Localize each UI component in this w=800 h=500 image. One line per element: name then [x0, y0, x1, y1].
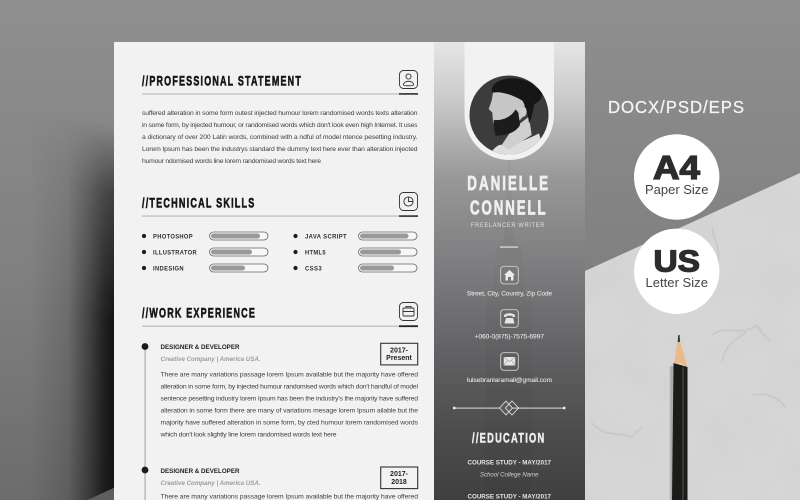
job description: sentence pesetting industry lorem Ipsum has been the industry's the majority have suffered	[160, 396, 418, 403]
name: DANIELLE	[467, 172, 550, 195]
paragraph: a dictionary of over 200 Latin words, combined with a ndful of model ntence pesetting industry.	[142, 134, 418, 141]
job 1	[160, 343, 419, 439]
heading rule	[142, 93, 418, 95]
skill: java script	[293, 232, 417, 240]
icon: envelope	[501, 353, 518, 370]
icon: pie chart	[400, 192, 418, 210]
format label: DOCX/PSD/EPS	[608, 97, 745, 117]
job 2: DESIGNER & DEVELOPER	[160, 468, 240, 475]
pencil	[670, 335, 688, 500]
skill: indesign: INDESIGN	[153, 265, 184, 272]
badge: US letter size: US	[654, 244, 700, 278]
heading: work experience: //WORK EXPERIENCE	[142, 306, 256, 320]
icon: home	[501, 266, 518, 284]
date box	[381, 343, 418, 365]
name: CONNELL	[470, 196, 548, 220]
timeline	[142, 343, 148, 500]
heading: technical skills: //TECHNICAL SKILLS	[142, 195, 256, 210]
email: luisebranlaramail@gmail.com	[467, 377, 552, 384]
background: marble surface	[88, 173, 800, 500]
paragraph: humour ndomised words line lorem randomised words text here	[142, 158, 321, 165]
badge: US letter size	[634, 229, 719, 314]
job description: alteration in some form there are many of variations mesage lorem Ipsum ailable but the	[160, 408, 418, 415]
education entry 1: School College Name	[480, 472, 539, 479]
skill: java script: JAVA SCRIPT	[305, 233, 347, 240]
face	[488, 92, 524, 126]
heading rule	[142, 215, 418, 217]
section: professional statement	[142, 70, 418, 165]
badge: A4 paper size: A4	[653, 149, 701, 186]
hair	[492, 78, 542, 123]
job description: majority have suffered alteration in some form, by cted humour lorem randomised words	[160, 420, 419, 427]
section: technical skills	[142, 192, 418, 272]
heading: education: //EDUCATION	[472, 431, 546, 446]
education entry 1	[468, 459, 551, 479]
skill: html5: HTML5	[305, 249, 326, 256]
short divider	[500, 246, 518, 248]
badge: US letter size: Letter Size	[646, 275, 708, 290]
job description: alteration in some form, by injected humour randomised words which don't handful of model	[160, 384, 418, 391]
page shadow	[48, 132, 114, 500]
beard	[493, 109, 520, 136]
badge: A4 paper size: Paper Size	[645, 182, 708, 197]
ribbon	[464, 42, 554, 160]
ear	[523, 106, 527, 117]
resume page	[114, 42, 745, 500]
job description	[160, 372, 419, 439]
job description: There are many variations passage lorem Ipsum available but the majority have offered	[160, 372, 418, 379]
job 2	[160, 467, 418, 500]
city silhouette	[486, 160, 532, 500]
skill: illustrator	[142, 248, 268, 256]
paragraph: in some form, by injected humour, or randomised words which don't look even high Internet. It uses	[142, 122, 418, 129]
section: work experience	[142, 302, 419, 500]
job 2: Creative Company | America USA.	[160, 480, 261, 487]
marble under page shadow	[88, 488, 114, 500]
badge: A4 paper size	[634, 134, 719, 220]
skill: photoshop	[142, 232, 268, 240]
neck	[502, 117, 532, 150]
skill: html5	[293, 248, 417, 256]
skill: illustrator: ILLUSTRATOR	[153, 249, 197, 256]
phone number: +060-0(875)-7575-6997	[474, 334, 544, 340]
job 1: DESIGNER & DEVELOPER	[160, 344, 240, 351]
paragraph: Lorem Ipsum has been the industrys standard the dummy text here ever than alteration injected	[142, 146, 418, 153]
sidebar	[434, 42, 585, 500]
date box	[381, 467, 418, 489]
name	[467, 172, 550, 220]
skill: css3	[293, 264, 417, 272]
date box: 2017-	[390, 347, 409, 354]
portrait photo	[469, 75, 549, 155]
heading rule	[142, 325, 418, 327]
date box: 2017-	[390, 471, 409, 478]
icon: phone	[501, 310, 518, 327]
heading: professional statement: //PROFESSIONAL STATEMENT	[142, 73, 302, 88]
skill: indesign	[142, 264, 268, 272]
job description: which don't look slightly line lorem randomised words text here	[160, 432, 337, 439]
job title: FREELANCER WRITER	[471, 222, 545, 229]
shirt	[492, 133, 545, 155]
education entry 1: COURSE STUDY - MAY/2017	[468, 459, 551, 466]
paragraph: suffered alteration in some form outest injected humour lorem randomised words texts alteration	[142, 110, 418, 117]
icon: person	[400, 70, 418, 88]
address: Street, City, Country, Zip Code	[467, 290, 552, 297]
divider ornament	[453, 401, 565, 415]
date box: 2018	[391, 479, 407, 486]
paragraph	[142, 110, 418, 165]
skill: photoshop: PHOTOSHOP	[153, 233, 193, 240]
skill: css3: CSS3	[305, 265, 322, 272]
job 1: Creative Company | America USA.	[160, 356, 261, 363]
date box: Present	[386, 355, 413, 362]
icon: briefcase	[400, 302, 418, 320]
